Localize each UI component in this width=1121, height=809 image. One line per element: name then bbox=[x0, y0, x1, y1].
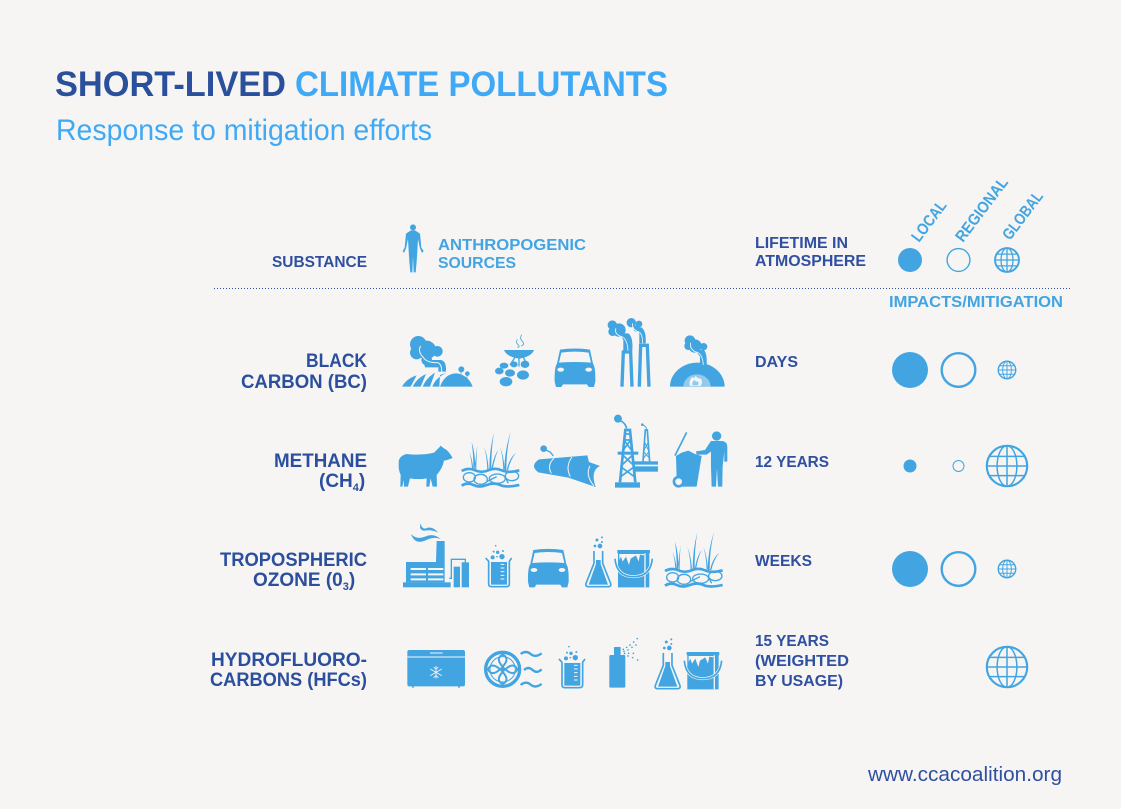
legend: global icon bbox=[995, 248, 1019, 272]
legend label: global: GLOBAL bbox=[1000, 188, 1047, 243]
column heading: anthropogenic sources bbox=[438, 237, 586, 272]
icon: agricultural burning bbox=[402, 336, 473, 387]
column heading: anthropogenic sources: SOURCES bbox=[438, 255, 516, 272]
legend label: local: LOCAL bbox=[909, 197, 951, 245]
label: black carbon: BLACK bbox=[306, 351, 367, 372]
icon: factory bbox=[403, 523, 469, 587]
icon: human figure bbox=[403, 224, 424, 272]
global impact bbox=[998, 361, 1016, 379]
label: hydrofluorocarbons: CARBONS (HFCs) bbox=[210, 670, 367, 691]
legend: local circle bbox=[898, 248, 922, 272]
column heading: substance: SUBSTANCE bbox=[272, 254, 367, 271]
lifetime: days: DAYS bbox=[755, 354, 798, 371]
icon: refrigerator bbox=[407, 650, 465, 688]
lifetime: 15 years: BY USAGE) bbox=[755, 673, 843, 690]
website url: www.ccacoalition.org bbox=[867, 764, 1062, 786]
global impact bbox=[998, 560, 1016, 578]
icons: hfc sources bbox=[407, 638, 722, 689]
column heading: anthropogenic sources: ANTHROPOGENIC bbox=[438, 237, 586, 254]
label: hydrofluorocarbons: HYDROFLUORO- bbox=[211, 650, 367, 671]
label: black carbon: CARBON (BC) bbox=[241, 372, 367, 393]
column heading: lifetime: LIFETIME IN bbox=[755, 235, 848, 252]
icon: car bbox=[528, 549, 569, 587]
icon: sheep bbox=[399, 446, 453, 487]
label: methane bbox=[274, 451, 367, 494]
icon: brick kiln bbox=[670, 335, 725, 387]
label: tropospheric ozone: ) bbox=[349, 570, 355, 591]
icon: cookstove bbox=[495, 335, 534, 386]
label: black carbon bbox=[241, 351, 367, 393]
icons: methane sources bbox=[399, 415, 727, 488]
icon: flask and paint bucket bbox=[586, 536, 652, 587]
subtitle: Response to mitigation efforts bbox=[56, 114, 432, 147]
row: hydrofluorocarbons bbox=[210, 633, 1027, 691]
label: hydrofluorocarbons bbox=[210, 650, 367, 691]
lifetime: 15 years bbox=[755, 633, 849, 690]
regional impact bbox=[942, 552, 975, 586]
label: tropospheric ozone: 3 bbox=[343, 581, 349, 593]
legend label: regional: REGIONAL bbox=[953, 174, 1012, 245]
icons: black carbon sources bbox=[402, 318, 725, 387]
lifetime: 15 years: 15 YEARS bbox=[755, 633, 829, 650]
icon: flask and paint bucket bbox=[655, 638, 722, 689]
icon: chemicals beaker bbox=[559, 646, 585, 688]
title: CLIMATE POLLUTANTS bbox=[295, 65, 668, 104]
label: tropospheric ozone: TROPOSPHERIC bbox=[220, 550, 367, 571]
label: methane: ) bbox=[359, 471, 365, 492]
row: methane bbox=[274, 415, 1027, 494]
column heading: lifetime: ATMOSPHERE bbox=[755, 253, 866, 270]
lifetime: weeks: WEEKS bbox=[755, 553, 812, 570]
legend: regional circle bbox=[947, 249, 970, 271]
global impact bbox=[987, 647, 1027, 687]
regional impact bbox=[942, 353, 975, 387]
local impact bbox=[892, 551, 928, 587]
icon: waste bin and person bbox=[673, 431, 727, 487]
regional impact bbox=[953, 460, 964, 472]
lifetime: 12 years: 12 YEARS bbox=[755, 454, 829, 471]
icon: wetland bbox=[462, 432, 519, 486]
label: tropospheric ozone bbox=[220, 550, 367, 593]
label: methane: 4 bbox=[353, 482, 360, 494]
column heading: lifetime bbox=[755, 235, 866, 270]
heading: impacts/mitigation: IMPACTS/MITIGATION bbox=[889, 294, 1063, 311]
title bbox=[55, 65, 668, 104]
row: tropospheric ozone bbox=[220, 523, 1016, 593]
lifetime: 15 years: (WEIGHTED bbox=[755, 653, 849, 670]
icon: pipeline bbox=[534, 445, 600, 487]
icon: wetland bbox=[665, 532, 723, 586]
icon: industrial stacks bbox=[608, 318, 649, 387]
global impact bbox=[987, 446, 1027, 486]
icon: oil rigs bbox=[614, 415, 658, 488]
icons: ozone sources bbox=[403, 523, 723, 587]
icon: chemicals beaker bbox=[486, 545, 512, 587]
title: SHORT-LIVED bbox=[55, 65, 286, 104]
label: methane: METHANE bbox=[274, 451, 367, 472]
row: black carbon bbox=[241, 318, 1016, 393]
local impact bbox=[892, 352, 928, 388]
label: tropospheric ozone: OZONE (0 bbox=[253, 570, 343, 591]
icon: air conditioning fan bbox=[486, 652, 542, 686]
label: methane: (CH bbox=[319, 471, 353, 492]
icon: aerosol can bbox=[609, 638, 638, 688]
local impact bbox=[904, 460, 916, 472]
icon: car bbox=[555, 348, 595, 387]
